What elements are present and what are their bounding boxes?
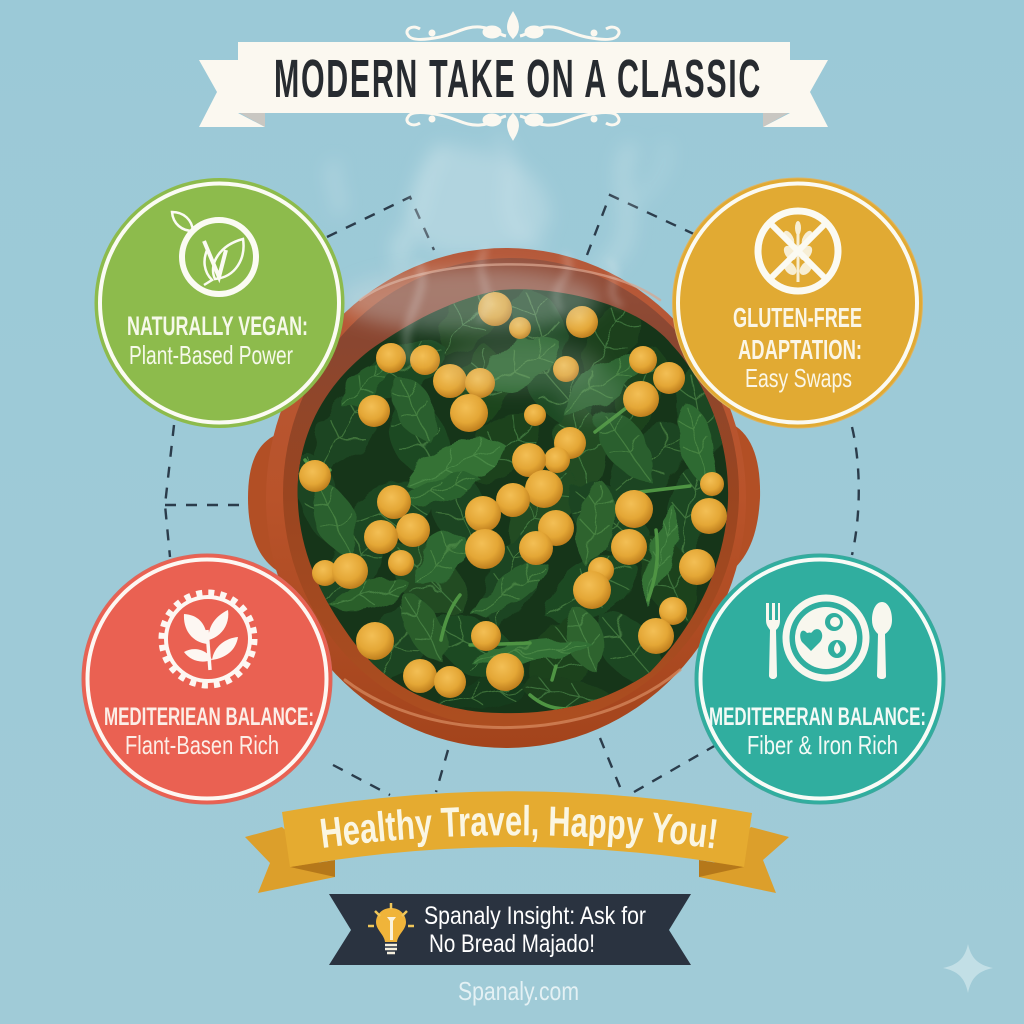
bowl body (266, 248, 746, 748)
clay bowl with spinach and chickpeas (248, 248, 760, 748)
dashed connector lines (165, 195, 859, 795)
text: gluten-free: GLUTEN-FREE (733, 302, 862, 333)
website footer: Spanaly.com (458, 976, 579, 1006)
text: mediterrean balance: MEDITERIEAN BALANCE: (104, 703, 314, 731)
rim highlights (345, 264, 680, 728)
text: adaptation: ADAPTATION: (738, 334, 862, 365)
title banner (199, 42, 828, 127)
bowl inner wall (283, 258, 739, 728)
icon: vegan leaf (172, 212, 256, 294)
steam over the food (340, 268, 624, 421)
icon: plate with fork and spoon (766, 598, 892, 679)
ornament: top flourish (407, 14, 619, 39)
text: flant-basen rich: Flant-Basen Rich (125, 730, 279, 760)
text: naturally vegan: NATURALLY VEGAN: (127, 311, 308, 341)
icon: light bulb (368, 903, 414, 953)
text: fiber and iron rich: Fiber & Iron Rich (747, 730, 898, 760)
wisps over the rim (406, 250, 620, 360)
icon: no wheat (758, 211, 838, 291)
panel: mediterranean balance red (82, 554, 332, 804)
stems (305, 405, 690, 709)
spinach (298, 289, 728, 714)
steam rising above the bowl (332, 140, 666, 275)
insight text: Spanaly Insight: Ask for (424, 902, 646, 930)
panel: naturally vegan (94, 178, 344, 428)
gold ribbon (245, 791, 789, 893)
bowl handles (248, 422, 760, 578)
chickpeas (299, 292, 727, 698)
panel: gluten-free (672, 178, 922, 428)
icon: sparkle (943, 944, 993, 993)
text: easy swaps: Easy Swaps (745, 363, 852, 393)
panel: mediterranean balance teal (695, 554, 945, 804)
icon: plant in seal (162, 593, 254, 685)
ornament: bottom flourish (407, 113, 619, 138)
ribbon text: Healthy Travel, Happy You! (320, 804, 717, 848)
insight banner (329, 894, 691, 965)
text: meditereran balance: MEDITERERAN BALANCE: (709, 703, 926, 731)
text: plant-based power: Plant-Based Power (129, 340, 293, 370)
insight text line two: No Bread Majado! (429, 930, 595, 958)
